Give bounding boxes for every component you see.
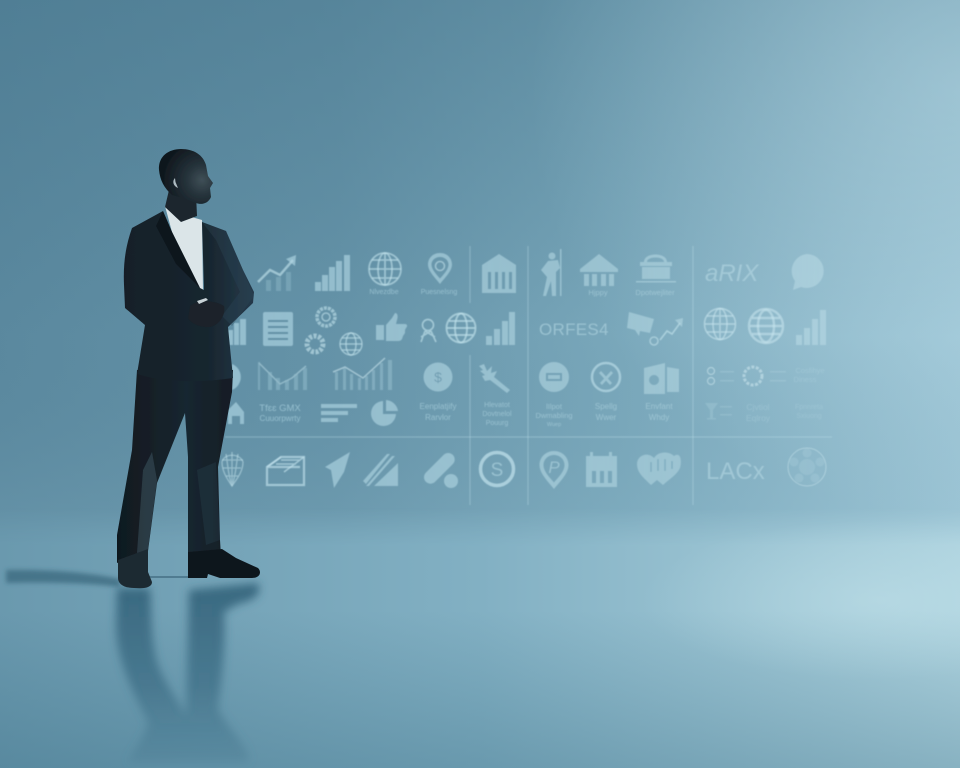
icon: thumbs up bbox=[376, 313, 407, 341]
icon: globe shield bbox=[222, 452, 243, 486]
icon: screen disc bbox=[539, 362, 569, 392]
person bbox=[117, 149, 260, 588]
label: Spellg Wwer: Wwer bbox=[596, 413, 617, 422]
person: jacket bbox=[124, 211, 254, 381]
label: Cosfihye Diness: Diness bbox=[794, 375, 817, 384]
label: Cosfihye Diness: Cosfihye bbox=[795, 366, 825, 375]
icon: folder with panels bbox=[644, 363, 679, 394]
label: Eenplatjify Rarvlor: Eenplatjify bbox=[420, 402, 456, 411]
label: Fpnnreta Sxiuong: Fpnnreta bbox=[795, 404, 823, 411]
icon: museum building bbox=[636, 254, 676, 282]
icon: partial circle bbox=[232, 364, 241, 390]
background floor bbox=[0, 505, 960, 768]
label: Dpotwejliter: Dpotwejliter bbox=[635, 288, 675, 297]
icon: double heart bbox=[637, 452, 681, 485]
person: right shoe bbox=[188, 549, 260, 578]
person: clasped hands bbox=[188, 298, 224, 327]
icon: globe bbox=[704, 308, 736, 340]
icon: dollar coin bbox=[424, 362, 452, 392]
icon row 4 labels bbox=[228, 400, 823, 428]
icon: globe bbox=[446, 314, 476, 342]
icon cluster: faint line diagrams bbox=[708, 367, 786, 385]
label: Cjvtiol Eqlroy: Cjvtiol bbox=[746, 402, 770, 412]
icon: dollar coin: $ bbox=[434, 369, 442, 385]
label: Cjvtiol Eqlroy: Eqlroy bbox=[746, 413, 771, 423]
label: Puesnelsng: Puesnelsng bbox=[421, 289, 457, 296]
label: Tfee GMX Cuuorpwrty: Cuuorpwrty bbox=[260, 414, 300, 423]
icon: globe bbox=[369, 253, 401, 285]
label: Hlevatot Dovtnelol Pouurg: Hlevatot bbox=[484, 402, 510, 409]
label: Envfant Whdy: Whdy bbox=[649, 413, 669, 422]
icon: dollar ring: S bbox=[491, 460, 503, 481]
icon: partial bar chart bbox=[228, 319, 246, 345]
icon: document bbox=[263, 312, 293, 346]
label: Spellg Wwer: Spellg bbox=[595, 402, 617, 411]
icon: fork and wrench bbox=[479, 364, 510, 393]
text: aRIX logo: aRIX bbox=[705, 260, 759, 287]
text: ORFES4: ORFES4 bbox=[539, 320, 609, 339]
icon: columned building bbox=[580, 254, 618, 286]
icon: horizontal bars bbox=[321, 404, 357, 422]
label: Ilipot Dwmabling Wuep: Wuep bbox=[547, 422, 561, 428]
icon: round badge one bbox=[317, 308, 335, 326]
icon: location pin bbox=[428, 253, 452, 284]
icon: pin with P: P bbox=[548, 458, 560, 477]
person: trousers bbox=[117, 370, 233, 563]
icon: calendar bbox=[586, 452, 617, 487]
icon: tools disc bbox=[592, 363, 620, 391]
label: Ilipot Dwmabling Wuep: lIlpot bbox=[546, 402, 563, 411]
person: neck and head bbox=[159, 149, 213, 222]
icon: ribbon figure bbox=[421, 320, 436, 342]
icon row 5 bbox=[222, 448, 826, 489]
icon: bank building bbox=[482, 254, 516, 293]
label: Nlvezdbe: Nlvezdbe bbox=[369, 289, 399, 296]
person reflection bbox=[116, 583, 259, 762]
cast shadow on floor bbox=[6, 570, 120, 587]
icon: pill with dot bbox=[421, 450, 458, 488]
icon: dollar ring bbox=[480, 452, 514, 486]
icon: speech bubble bbox=[792, 254, 824, 290]
icon: pin with P bbox=[540, 451, 568, 489]
person: shirt bbox=[165, 206, 206, 342]
icon: bar chart bbox=[486, 312, 515, 345]
icon: envelope bbox=[267, 457, 304, 485]
icon: message card bbox=[627, 312, 654, 336]
icon: bars with trend line bbox=[333, 358, 392, 390]
text: LACx: LACx bbox=[706, 458, 765, 485]
icon row 3 bbox=[232, 358, 825, 394]
icon wall bbox=[222, 246, 832, 505]
label: Envfant Whdy: Envfant bbox=[645, 402, 673, 411]
icon: rising arrow bbox=[650, 318, 683, 345]
label: Hlevatot Dovtnelol Pouurg: Dovtnelol bbox=[482, 411, 512, 418]
icon: trend line with bars bbox=[258, 255, 296, 291]
icon cluster: faint glass and lines bbox=[705, 403, 732, 420]
icon: round badge three bbox=[340, 333, 362, 355]
label: Hjppy: Hjppy bbox=[588, 288, 608, 297]
icon row 2 bbox=[228, 308, 826, 355]
icon: round badge two bbox=[307, 336, 323, 352]
icon row 1 bbox=[258, 249, 824, 297]
label: Eenplatjify Rarvlor: Rarvlor bbox=[425, 413, 451, 422]
floor contact line bbox=[148, 576, 190, 578]
icon: striped triangle bbox=[363, 454, 398, 486]
person: left shoe bbox=[118, 549, 152, 588]
icon: bar chart bbox=[315, 255, 350, 291]
icon: soccer ball bbox=[788, 448, 826, 486]
icon: globe bbox=[749, 309, 783, 343]
icon: bars with line bbox=[258, 362, 307, 390]
label: Hlevatot Dovtnelol Pouurg: Pouurg bbox=[486, 420, 508, 427]
icon: partial house bbox=[228, 402, 244, 424]
icon: lightning bolt bbox=[325, 452, 350, 488]
icon: pie chart bbox=[371, 400, 398, 426]
icon: bar chart bbox=[796, 310, 826, 345]
grid lines bbox=[225, 246, 832, 505]
icon: standing figure with staff bbox=[541, 249, 562, 296]
label: Ilipot Dwmabling Wuep: Dwmabling bbox=[535, 411, 573, 420]
label: Tfee GMX Cuuorpwrty: Tfɛɛ GMX bbox=[259, 403, 301, 414]
label: Fpnnreta Sxiuong: Sxiuong bbox=[796, 413, 822, 420]
